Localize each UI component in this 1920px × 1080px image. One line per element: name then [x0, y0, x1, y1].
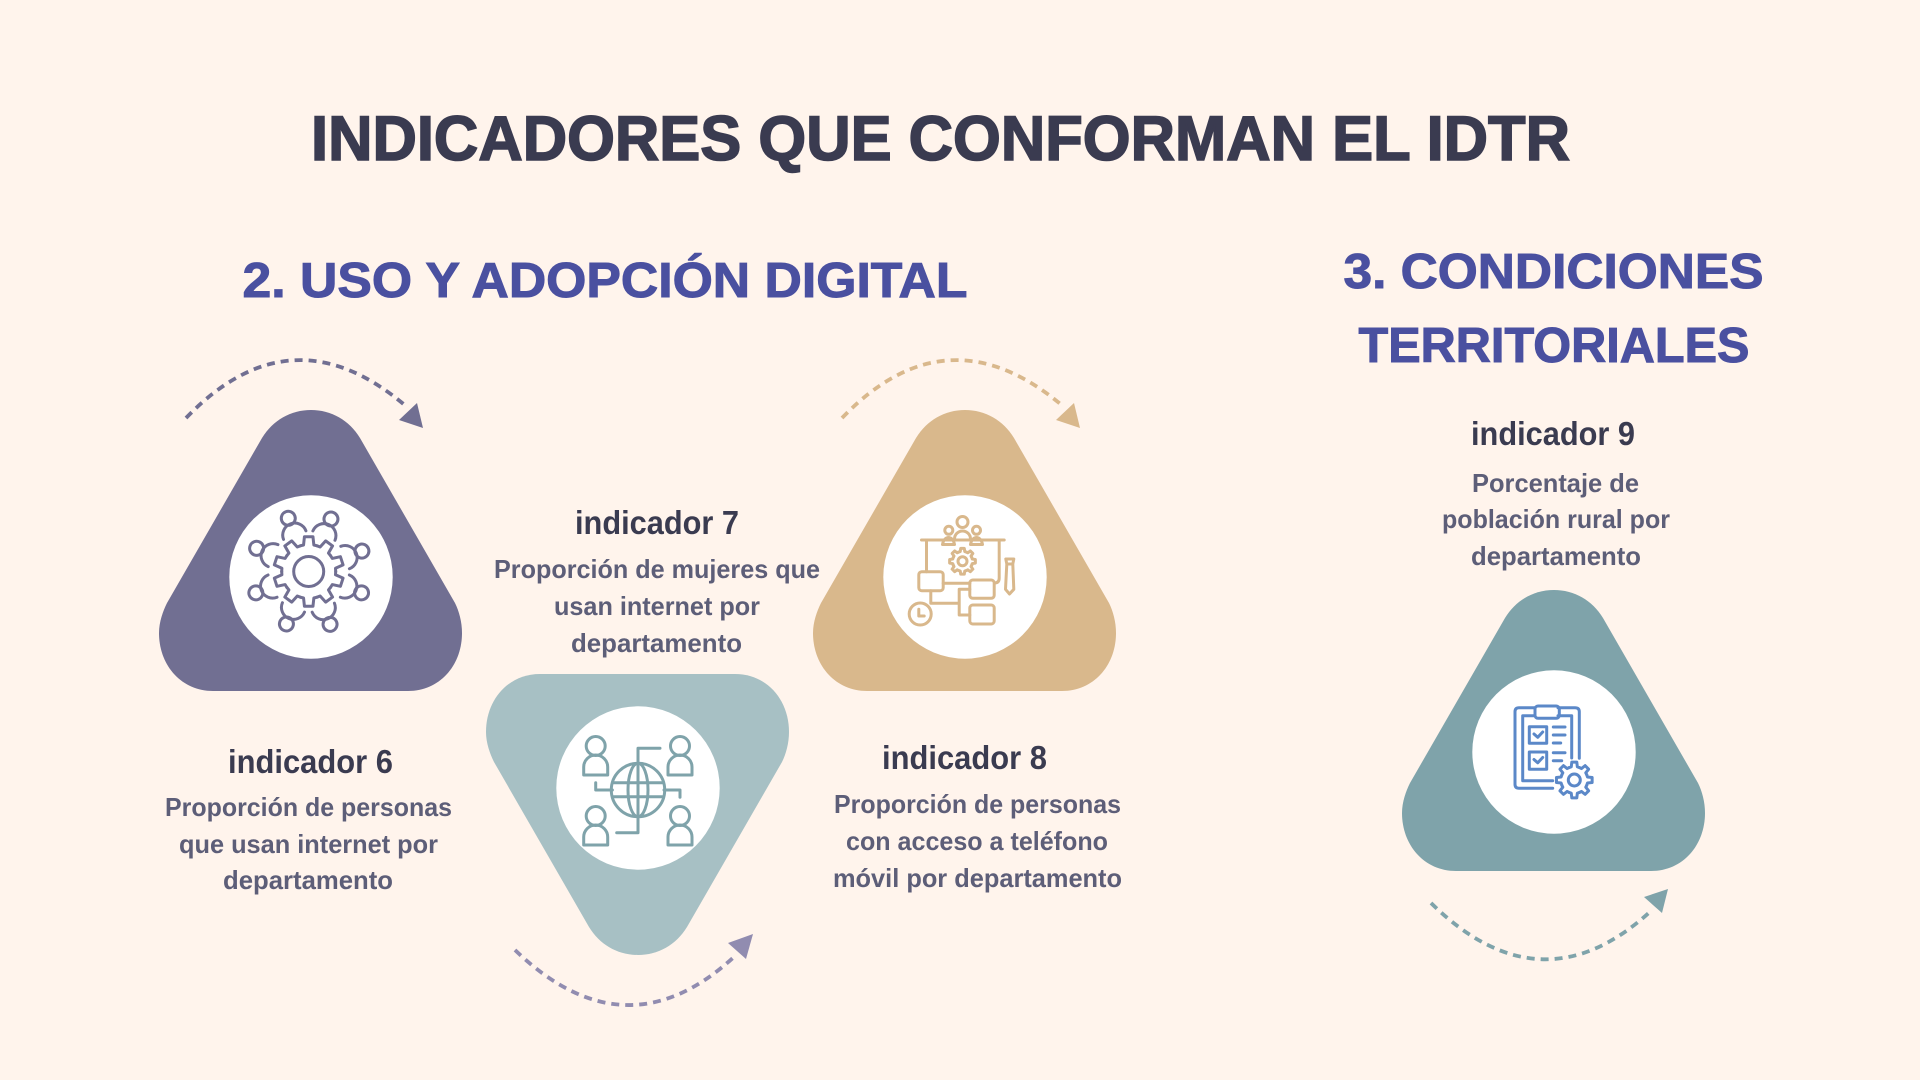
description: indicador 9	[1442, 468, 1670, 571]
description: indicador 8: Proporción de personas	[834, 789, 1121, 819]
panel: indicador 8	[813, 360, 1122, 893]
description: indicador 6	[165, 792, 452, 895]
heading: condiciones territoriales	[1344, 245, 1764, 373]
description: indicador 8: móvil por departamento	[833, 863, 1122, 893]
label: indicador 8: indicador 8	[882, 739, 1047, 776]
triangle: teal	[1402, 590, 1705, 871]
arrow: purple dashed	[186, 360, 423, 428]
heading: condiciones territoriales: 3. CONDICIONES	[1344, 245, 1764, 299]
description: indicador 8	[833, 789, 1122, 893]
icon: gear with people	[245, 507, 373, 635]
label: indicador 9: indicador 9	[1471, 415, 1635, 452]
label: indicador 7: indicador 7	[575, 504, 739, 541]
icon circle	[883, 495, 1047, 659]
arrow: lilac dashed	[515, 934, 753, 1005]
description: indicador 8: con acceso a teléfono	[846, 826, 1108, 856]
description: indicador 7: usan internet por	[554, 591, 760, 621]
panel: indicador 9	[1402, 415, 1705, 959]
description: indicador 7: departamento	[571, 628, 742, 658]
arrow: tan dashed	[842, 360, 1080, 428]
panel: indicador 6	[159, 360, 462, 895]
description: indicador 7	[494, 554, 820, 658]
icon: people and globe network	[584, 736, 692, 845]
description: indicador 6: que usan internet por	[179, 829, 438, 859]
label: indicador 6: indicador 6	[228, 743, 393, 780]
icon: organisation flowchart	[909, 516, 1014, 625]
description: indicador 9: población rural por	[1442, 504, 1670, 534]
title: INDICADORES QUE CONFORMAN EL IDTR	[311, 104, 1570, 174]
icon circle	[1472, 670, 1636, 834]
description: indicador 6: departamento	[223, 865, 393, 895]
icon: clipboard with gear	[1515, 706, 1592, 798]
description: indicador 7: Proporción de mujeres que	[494, 554, 820, 584]
triangle: purple	[159, 410, 462, 691]
description: indicador 9: Porcentaje de	[1472, 468, 1639, 498]
panel: indicador 7	[486, 504, 820, 1005]
triangle: tan	[813, 410, 1116, 691]
heading: uso y adopción digital: 2. USO Y ADOPCIÓN DIGITAL	[242, 253, 968, 308]
heading: condiciones territoriales: TERRITORIALES	[1358, 319, 1750, 373]
arrow: teal dashed	[1431, 889, 1668, 959]
triangle: light teal inverted	[486, 674, 789, 955]
icon circle	[229, 495, 393, 659]
description: indicador 9: departamento	[1471, 541, 1641, 571]
icon circle	[556, 706, 720, 870]
description: indicador 6: Proporción de personas	[165, 792, 452, 822]
